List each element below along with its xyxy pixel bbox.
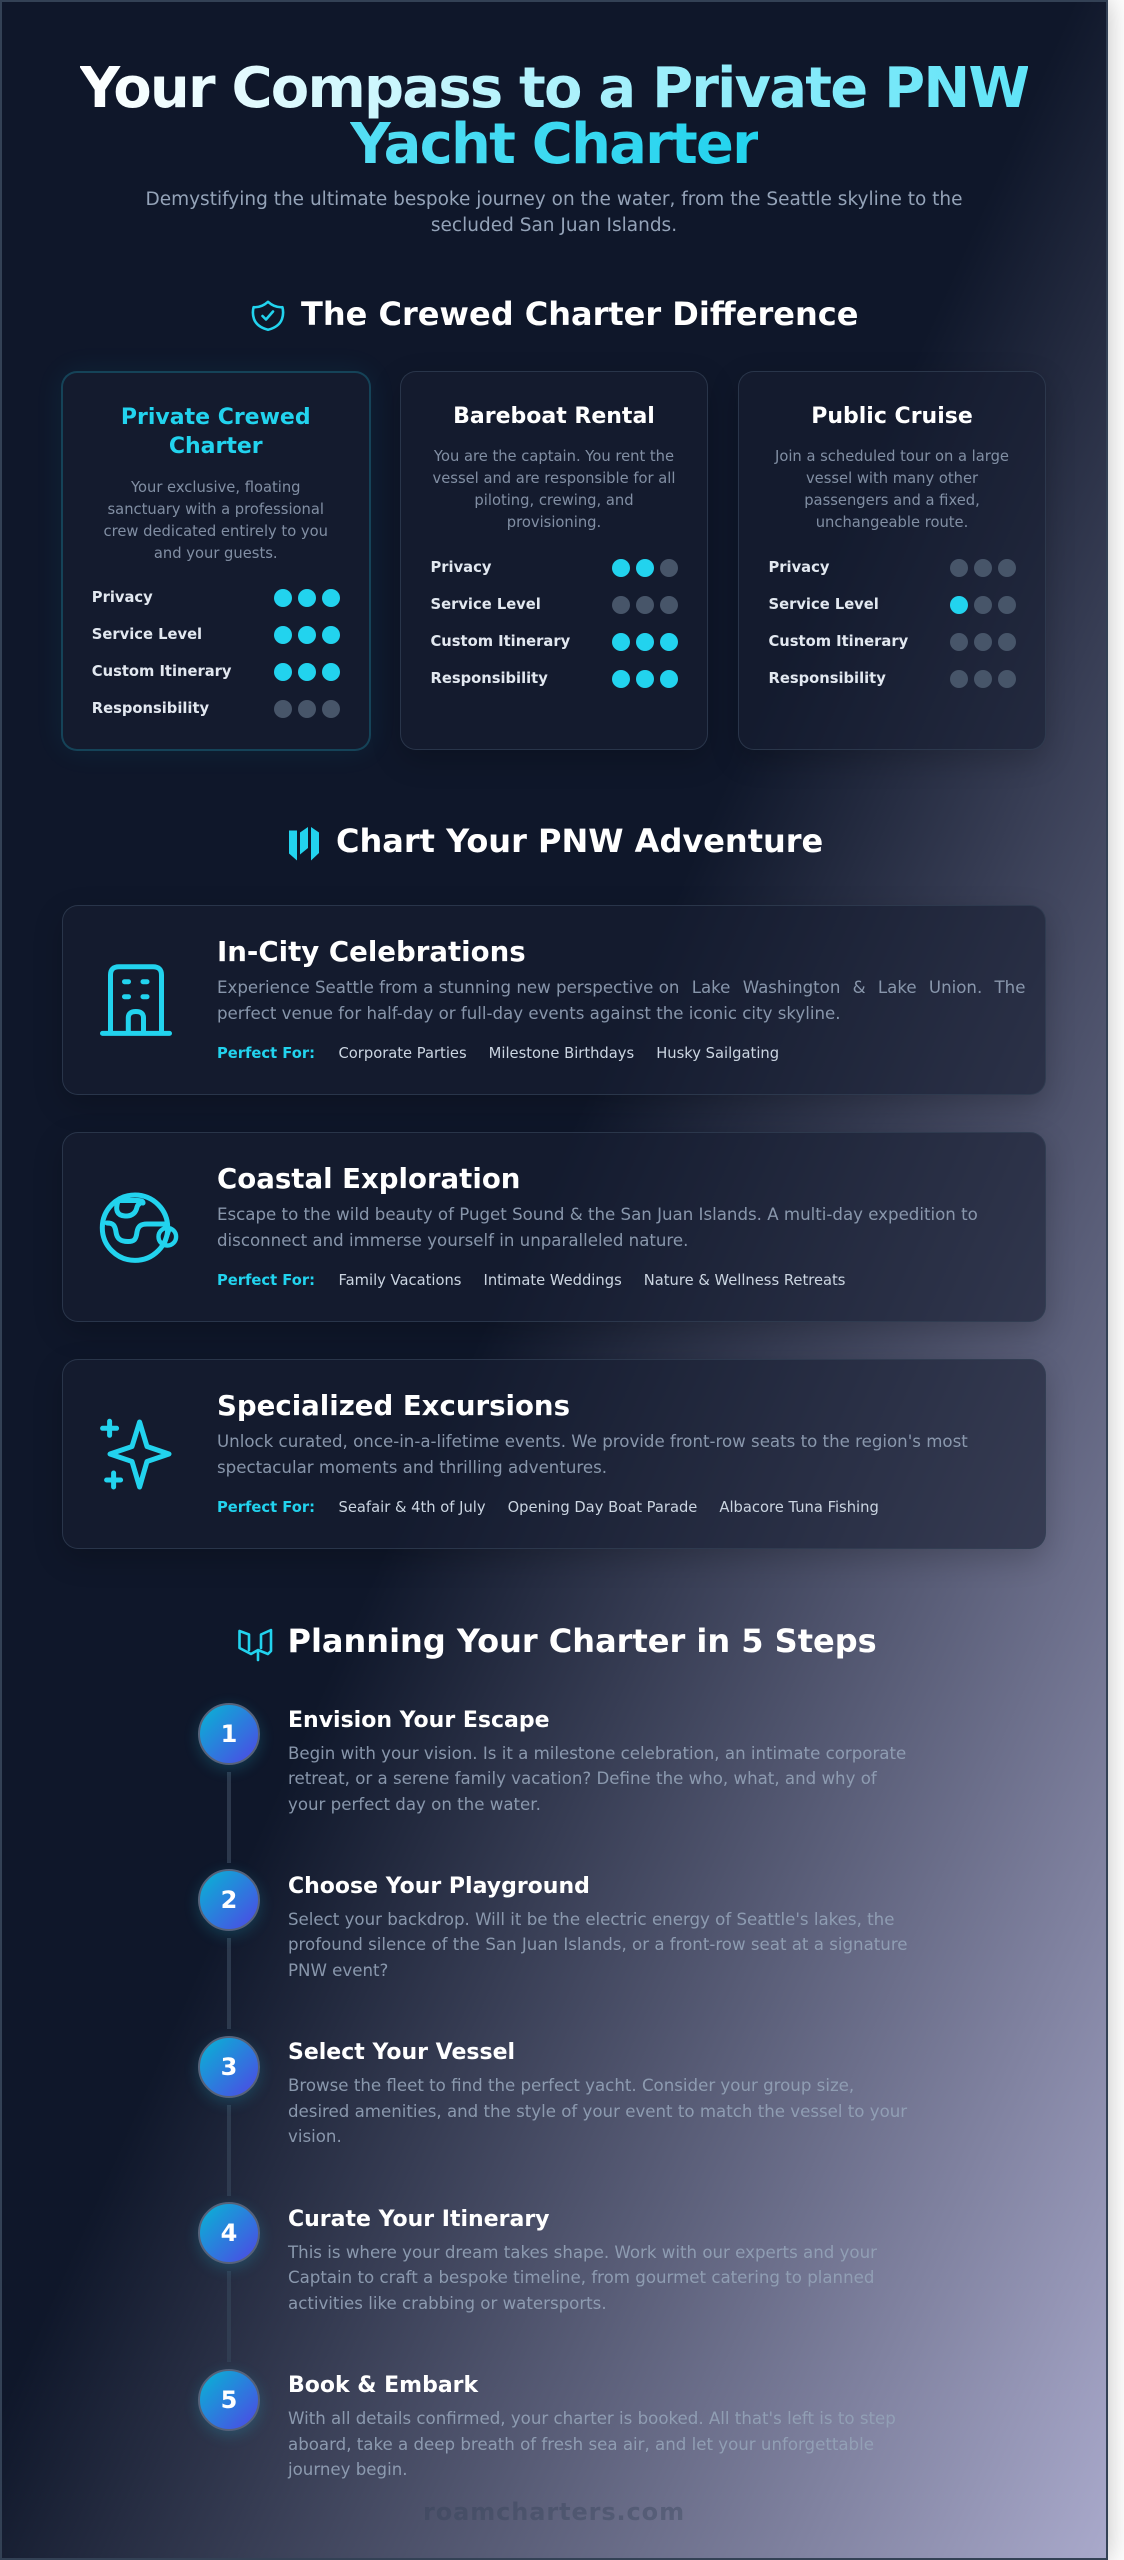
step 2 text: PNW event? — [288, 1961, 388, 1980]
panel: specialized excursions — [62, 1359, 1046, 1549]
step 2 text: Select your backdrop. Will it be the electric energy of Seattle's lakes, the — [288, 1910, 894, 1929]
rating: responsibility — [430, 670, 678, 688]
subtitle — [145, 189, 963, 236]
card description: sanctuary with a professional — [108, 501, 324, 518]
title: Your Compass to a Private PNW — [80, 56, 1028, 121]
rating: service level: Service Level — [92, 626, 202, 643]
rating: custom itinerary: Custom Itinerary — [768, 633, 908, 650]
card title: Coastal Exploration — [217, 1162, 520, 1194]
step 4 title: Curate Your Itinerary — [288, 2207, 550, 2232]
card description — [104, 478, 328, 562]
step 1 text: retreat, or a serene family vacation? Define the who, what, and why of — [288, 1769, 877, 1788]
step 3 text: desired amenities, and the style of your event to match the vessel to your — [288, 2102, 907, 2121]
card title: Private Crewed — [121, 404, 311, 430]
card description: Unlock curated, once-in-a-lifetime events. We provide front-row seats to the region's most — [217, 1432, 968, 1451]
rating: custom itinerary — [430, 633, 678, 651]
card title: In-City Celebrations — [217, 934, 526, 968]
panel: private crewed charter — [60, 370, 371, 750]
card title: Charter — [169, 434, 263, 459]
icon: shield check — [252, 300, 284, 332]
card description: piloting, crewing, and — [474, 492, 634, 509]
card description — [217, 1205, 978, 1250]
step 2 text — [288, 1910, 908, 1980]
card description: vessel and are responsible for all — [433, 470, 675, 487]
step 2 text: profound silence of the San Juan Islands, or a front-row seat at a signature — [288, 1935, 908, 1954]
step 5 text: journey begin. — [288, 2460, 408, 2479]
footer: roamcharters.com — [423, 2498, 685, 2526]
panel: public cruise — [738, 371, 1046, 750]
step 3 text: Browse the fleet to find the perfect yacht. Consider your group size, — [288, 2076, 854, 2095]
rating: service level — [430, 596, 678, 614]
step 1 text: your perfect day on the water. — [288, 1795, 541, 1814]
card description: Your exclusive, floating — [131, 478, 301, 496]
rating: responsibility — [768, 670, 1016, 688]
step 4 text — [288, 2243, 877, 2313]
card description: unchangeable route. — [816, 514, 968, 531]
rating: privacy — [768, 559, 1016, 577]
rating: responsibility: Responsibility — [430, 670, 548, 687]
step connector 1 — [227, 1772, 231, 1863]
title — [80, 56, 1028, 177]
card description — [774, 448, 1009, 531]
subtitle: secluded San Juan Islands. — [431, 215, 677, 236]
title: Yacht Charter — [350, 112, 758, 177]
step 4 number — [198, 2202, 260, 2264]
rating: privacy: Privacy — [768, 559, 829, 576]
rating: privacy: Privacy — [92, 589, 153, 606]
step 4 text: This is where your dream takes shape. Work with our experts and your — [288, 2243, 877, 2262]
step 1 number — [198, 1703, 260, 1765]
perfect for tags: Perfect For: Family Vacations Intimate Weddings Nature & Wellness Retreats — [217, 1272, 845, 1288]
step 1 number: 1 — [221, 1720, 237, 1748]
rating: service level — [768, 596, 1016, 614]
step 2 title: Choose Your Playground — [288, 1874, 590, 1899]
step connector 3 — [227, 2105, 231, 2196]
step 4 text: activities like crabbing or watersports. — [288, 2294, 607, 2313]
heading: planning steps: Planning Your Charter in 5 Steps — [288, 1622, 877, 1660]
rating: responsibility: Responsibility — [92, 700, 209, 717]
rating: custom itinerary — [768, 633, 1016, 651]
card title: Specialized Excursions — [217, 1388, 570, 1422]
step 5 text: aboard, take a deep breath of fresh sea air, and let your unforgettable — [288, 2435, 874, 2454]
rating: responsibility: Responsibility — [768, 670, 886, 687]
card description — [217, 978, 1025, 1023]
icon: open book map — [238, 1628, 272, 1662]
card description — [433, 448, 675, 531]
rating: service level — [92, 626, 340, 644]
step 5 number: 5 — [221, 2386, 237, 2414]
card description: perfect venue for half-day or full-day events against the iconic city skyline. — [217, 1004, 841, 1023]
card description: disconnect and immerse yourself in unparalleled nature. — [217, 1231, 688, 1250]
step 1 text — [288, 1744, 906, 1814]
step 2 number — [198, 1869, 260, 1931]
card description: and your guests. — [154, 545, 278, 562]
step 1 title: Envision Your Escape — [288, 1708, 550, 1732]
icon: building — [100, 964, 172, 1036]
heading: chart your adventure: Chart Your PNW Adventure — [336, 822, 823, 860]
card title: Bareboat Rental — [453, 404, 655, 429]
step 5 text: With all details confirmed, your charter is booked. All that's left is to step — [288, 2409, 896, 2428]
rating: custom itinerary: Custom Itinerary — [92, 663, 232, 680]
card description: crew dedicated entirely to you — [104, 523, 328, 540]
step connector 2 — [227, 1938, 231, 2029]
card description: Experience Seattle from a stunning new perspective on Lake Washington & Lake Union. The — [217, 978, 1025, 997]
card description: passengers and a fixed, — [804, 492, 980, 509]
icon: globe — [100, 1192, 178, 1263]
step 3 text: vision. — [288, 2127, 342, 2146]
panel: coastal exploration — [62, 1132, 1046, 1322]
step 4 text: Captain to craft a bespoke timeline, from gourmet catering to planned — [288, 2268, 874, 2287]
rating: custom itinerary: Custom Itinerary — [430, 633, 570, 650]
card description: provisioning. — [507, 514, 601, 531]
rating: privacy: Privacy — [430, 559, 491, 576]
card description — [217, 1432, 968, 1477]
rating: service level: Service Level — [768, 596, 879, 613]
card description: You are the captain. You rent the — [434, 448, 674, 464]
step 1 text: Begin with your vision. Is it a milestone celebration, an intimate corporate — [288, 1744, 906, 1762]
step 3 number: 3 — [221, 2053, 237, 2081]
step 2 number: 2 — [221, 1886, 237, 1914]
subtitle: Demystifying the ultimate bespoke journey on the water, from the Seattle skyline to the — [145, 189, 963, 210]
rating: privacy — [92, 589, 340, 607]
step 3 number — [198, 2036, 260, 2098]
icon: sparkle — [100, 1418, 172, 1490]
panel: in-city celebrations — [62, 905, 1046, 1095]
perfect for tags: Perfect For: Seafair & 4th of July Opening Day Boat Parade Albacore Tuna Fishing — [217, 1498, 879, 1516]
step 5 number — [198, 2369, 260, 2431]
step 4 number: 4 — [221, 2219, 237, 2247]
step 5 title: Book & Embark — [288, 2373, 478, 2398]
card title — [121, 404, 311, 459]
heading: crewed charter difference: The Crewed Charter Difference — [301, 295, 858, 333]
panel: bareboat rental — [400, 371, 708, 750]
rating: responsibility — [92, 700, 340, 718]
card description: vessel with many other — [806, 470, 978, 487]
step connector 4 — [227, 2271, 231, 2362]
step 3 text — [288, 2076, 907, 2146]
rating: custom itinerary — [92, 663, 340, 681]
step 3 title: Select Your Vessel — [288, 2040, 515, 2065]
rating: service level: Service Level — [430, 596, 541, 613]
card description: Join a scheduled tour on a large — [775, 448, 1009, 464]
rating: privacy — [430, 559, 678, 577]
icon: map — [289, 827, 319, 860]
step 5 text — [288, 2406, 896, 2483]
card description: spectacular moments and thrilling adventures. — [217, 1458, 607, 1477]
perfect for tags: Perfect For: Corporate Parties Milestone Birthdays Husky Sailgating — [217, 1044, 779, 1062]
card description: Escape to the wild beauty of Puget Sound & the San Juan Islands. A multi-day expedition to — [217, 1205, 978, 1224]
card title: Public Cruise — [811, 404, 973, 429]
